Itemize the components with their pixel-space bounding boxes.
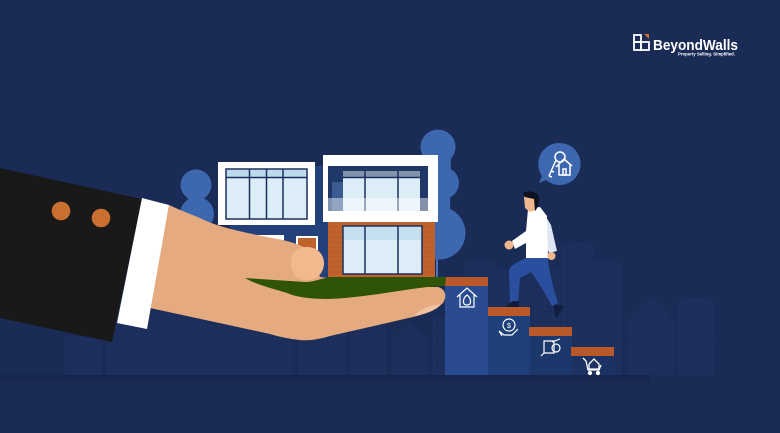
step 2 xyxy=(488,307,530,375)
background city skyline xyxy=(65,243,714,375)
sleeve button xyxy=(92,209,110,227)
hand xyxy=(150,205,445,340)
house: brick ground floor xyxy=(328,222,435,277)
thumb xyxy=(291,247,324,280)
sleeve xyxy=(0,168,142,342)
icon: shopping cart with house xyxy=(583,358,601,374)
head xyxy=(524,197,536,212)
sleeve button xyxy=(52,202,70,220)
icon: key and house xyxy=(549,152,572,177)
icon: hand with coin house: $ xyxy=(507,323,511,330)
ground line xyxy=(0,375,650,381)
step 3 xyxy=(529,327,572,375)
logo tagline: Property Selling. Simplified. xyxy=(678,52,735,56)
logo xyxy=(634,34,738,56)
tree right xyxy=(412,130,466,277)
shirt xyxy=(512,207,548,258)
icon: house with money bag xyxy=(457,288,477,307)
tree left xyxy=(180,170,214,231)
icon: hand with coin house xyxy=(499,319,518,336)
house: lower left details xyxy=(250,235,284,240)
shirt cuff xyxy=(117,198,169,329)
person walking up steps xyxy=(504,191,564,317)
icon: calculator and coin xyxy=(541,339,560,356)
logo icon xyxy=(634,34,649,50)
step 1 xyxy=(445,277,488,375)
trousers xyxy=(509,258,558,306)
step 4 xyxy=(571,347,614,375)
far arm xyxy=(540,212,557,253)
shoes xyxy=(505,301,519,307)
logo wordmark: BeyondWalls xyxy=(653,37,738,54)
house xyxy=(218,155,438,277)
step columns xyxy=(445,277,614,375)
speech bubble with key and house icon xyxy=(538,143,581,185)
hands xyxy=(504,240,514,250)
house: upper right box xyxy=(323,155,438,222)
grass on palm xyxy=(245,277,446,299)
fingertip shade xyxy=(414,304,441,316)
house: left upper box xyxy=(218,162,315,225)
house: dark wall xyxy=(230,222,330,277)
hair xyxy=(523,191,539,211)
